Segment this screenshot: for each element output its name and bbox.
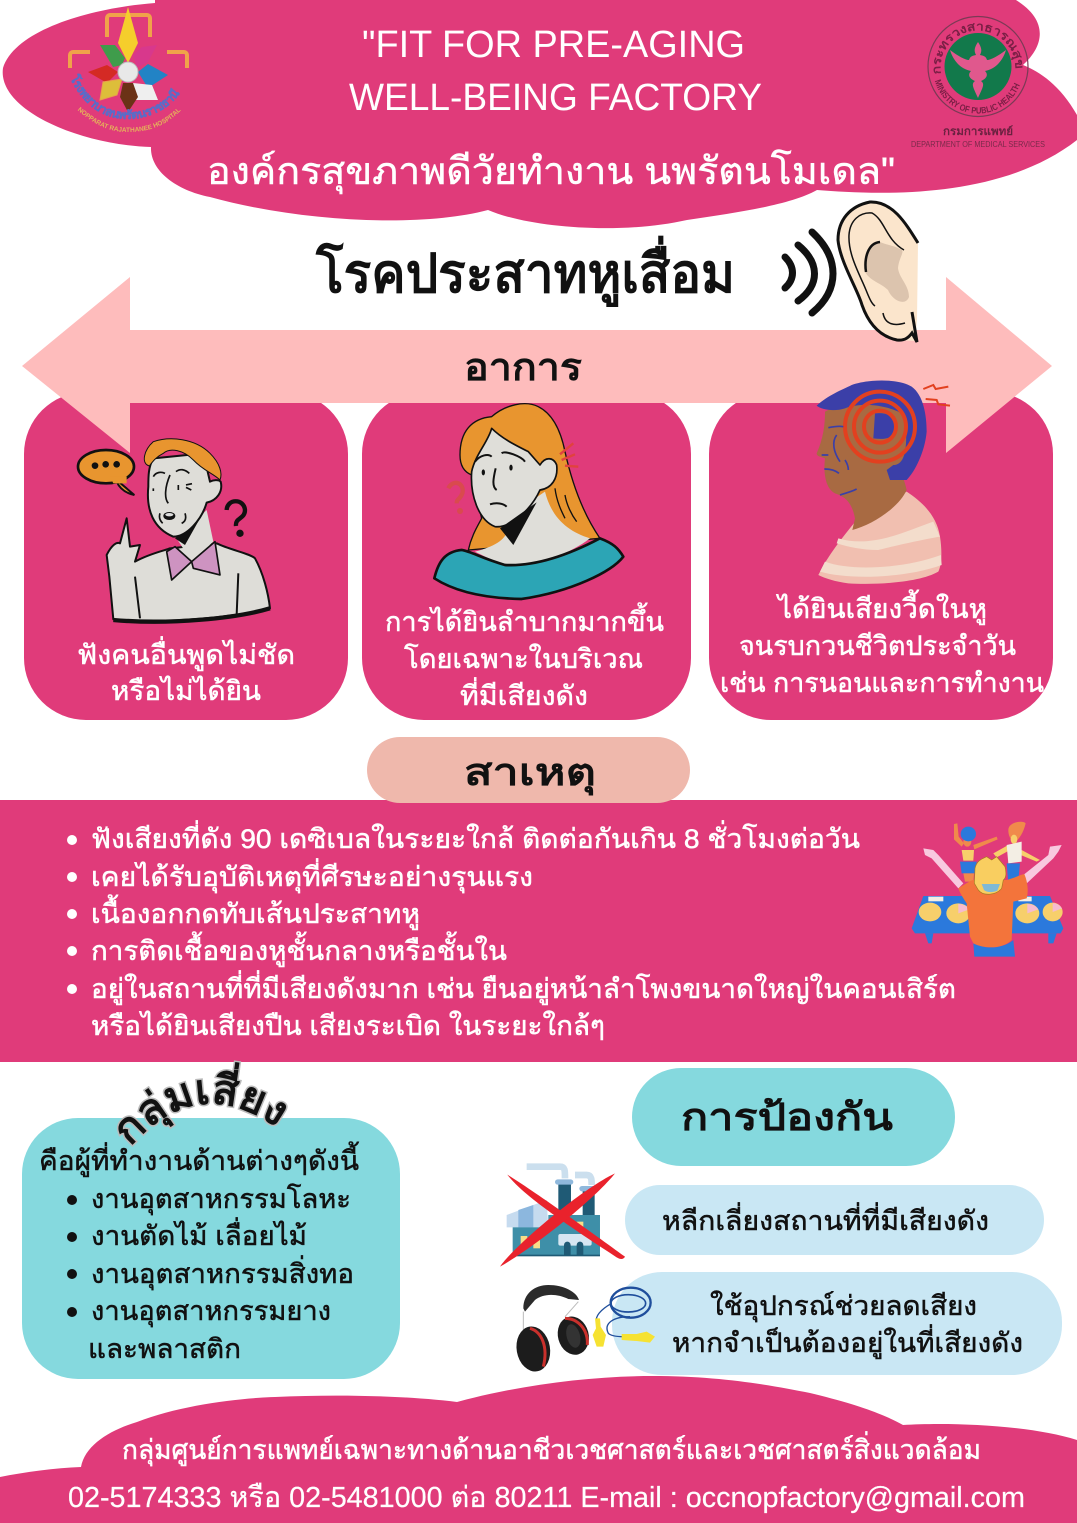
causes list: ฟังเสียงที่ดัง 90 เดซิเบลในระยะใกล้ ติดต่อกันเกิน 8 ชั่วโมงต่อวัน: [91, 820, 860, 854]
prevention item 2 pill: หากจำเป็นต้องอยู่ในที่เสียงดัง: [672, 1324, 1023, 1359]
illustration: confused man: [78, 439, 270, 622]
causes heading pill: สาเหตุ: [464, 752, 596, 796]
causes heading pill: [367, 737, 690, 803]
left hospital logo: โรงพยาบาลนพรัตนราชธานี: [72, 74, 180, 120]
prevention heading pill: [632, 1068, 955, 1166]
icon: sound waves: [785, 232, 833, 313]
header title: WELL-BEING FACTORY: [349, 77, 762, 119]
footer text: [68, 1431, 1025, 1514]
symptom 1 text: หรือไม่ได้ยิน: [111, 676, 261, 706]
footer cloud: [0, 1376, 1077, 1523]
prevention item 1 pill: หลีกเลี่ยงสถานที่ที่มีเสียงดัง: [662, 1202, 989, 1236]
symptom 3 text: เช่น การนอนและการทำงาน: [720, 668, 1044, 698]
illustration: DJ and dancers: [912, 822, 1063, 957]
right ministry logo: [911, 16, 1045, 149]
risk group text: และพลาสติก: [88, 1334, 241, 1364]
symptom 2 text: โดยเฉพาะในบริเวณ: [404, 643, 643, 674]
risk group panel: [22, 1118, 400, 1379]
symptom card 2: [362, 392, 691, 720]
illustration: man with tinnitus: [817, 380, 950, 584]
causes list: การติดเชื้อของหูชั้นกลางหรือชั้นใน: [91, 931, 507, 967]
left hospital logo: NOPPARAT RAJATHANEE HOSPITAL: [78, 107, 181, 132]
symptom 1 text: [77, 636, 295, 706]
right ministry logo: กระทรวงสาธารณสุข: [934, 23, 1022, 74]
risk group text: [39, 1141, 359, 1364]
risk group text: งานอุตสาหกรรมโลหะ: [91, 1184, 351, 1216]
icon: crossed-out factory: [500, 1167, 625, 1267]
causes list: เคยได้รับอุบัติเหตุที่ศีรษะอย่างรุนแรง: [91, 858, 533, 894]
symptom 2 text: การได้ยินลำบากมากขึ้น: [385, 602, 664, 637]
symptom 3 text: จนรบกวนชีวิตประจำวัน: [739, 631, 1016, 661]
causes list: [67, 820, 956, 1041]
icon: ear: [838, 202, 918, 342]
right ministry logo: กรมการแพทย์: [943, 125, 1013, 138]
illustration: woman with hearing difficulty: [434, 404, 623, 599]
symptom 3 text: ได้ยินเสียงวี้ดในหู: [776, 589, 987, 625]
header cloud banner: [3, 0, 1077, 228]
prevention heading pill: การป้องกัน: [681, 1097, 893, 1139]
header title: องค์กรสุขภาพดีวัยทำงาน นพรัตนโมเดล": [207, 149, 895, 194]
symptom 2 text: ที่มีเสียงดัง: [460, 677, 588, 711]
causes band: [0, 800, 1077, 1062]
symptom card 1: [24, 392, 348, 720]
double-headed arrow banner: [22, 277, 1052, 453]
left hospital logo: [68, 7, 189, 132]
prevention item 1 pill: [625, 1185, 1044, 1255]
right ministry logo: DEPARTMENT OF MEDICAL SERVICES: [911, 140, 1045, 149]
header title: [207, 24, 895, 194]
risk group text: งานอุตสาหกรรมยาง: [91, 1296, 331, 1328]
footer text: กลุ่มศูนย์การแพทย์เฉพาะทางด้านอาชีวเวชศาสตร์และเวชศาสตร์สิ่งแวดล้อม: [122, 1431, 981, 1467]
right ministry logo: MINISTRY OF PUBLIC HEALTH: [934, 79, 1020, 114]
causes list: อยู่ในสถานที่ที่มีเสียงดังมาก เช่น ยืนอยู่หน้าลำโพงขนาดใหญ่ในคอนเสิร์ต: [91, 970, 956, 1005]
symptom 1 text: ฟังคนอื่นพูดไม่ชัด: [77, 636, 295, 671]
causes list: หรือได้ยินเสียงปืน เสียงระเบิด ในระยะใกล้ๆ: [91, 1010, 605, 1041]
header title: "FIT FOR PRE-AGING: [362, 24, 745, 66]
symptom card 3: [709, 392, 1053, 720]
symptom 2 text: [385, 602, 664, 711]
icon: earmuffs and earplugs: [513, 1285, 655, 1374]
prevention item 2 pill: ใช้อุปกรณ์ช่วยลดเสียง: [710, 1290, 977, 1323]
main title: โรคประสาทหูเสื่อม: [315, 235, 735, 307]
risk group text: คือผู้ที่ทำงานด้านต่างๆดังนี้: [39, 1141, 359, 1177]
footer text: 02-5174333 หรือ 02-5481000 ต่อ 80211 E-mail : occnopfactory@gmail.com: [68, 1482, 1025, 1514]
causes list: เนื้องอกกดทับเส้นประสาทหู: [91, 894, 420, 930]
risk group text: งานตัดไม้ เลื่อยไม้: [91, 1217, 307, 1251]
risk group text: งานอุตสาหกรรมสิ่งทอ: [91, 1255, 354, 1291]
symptom 3 text: [720, 589, 1044, 698]
risk group curved heading: กลุ่มเสี่ยง: [116, 1060, 288, 1147]
heading: symptoms: อาการ: [464, 347, 583, 389]
prevention item 2 pill: [612, 1272, 1062, 1375]
